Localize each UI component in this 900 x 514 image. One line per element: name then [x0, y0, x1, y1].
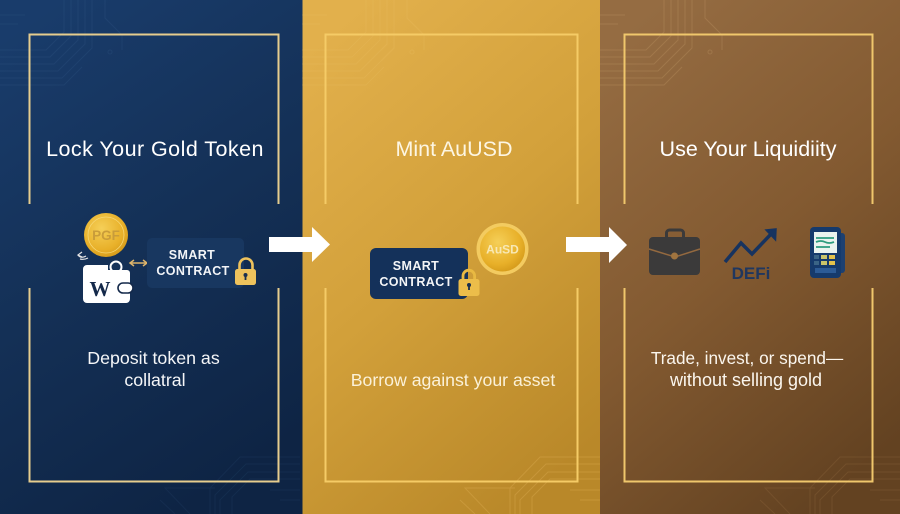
arrow: step 2 to step 3	[566, 227, 627, 263]
icon: DeFi growth chart: DEFi	[732, 264, 770, 283]
icon: gold token coin	[84, 213, 128, 257]
icon: AuUSD coin	[476, 223, 528, 275]
heading: Mint AuUSD: Mint AuUSD	[395, 137, 513, 161]
icon: DeFi growth chart	[725, 229, 776, 283]
frame: step 1	[30, 34, 278, 482]
panel: step 3 background	[600, 0, 900, 514]
arrow: step 1 to step 2	[269, 227, 330, 262]
text: step 3 description	[651, 348, 844, 390]
frame: step 2	[326, 34, 578, 482]
smart contract box: step 1: CONTRACT	[156, 264, 230, 278]
panel: step 2 background	[302, 0, 600, 514]
text: step 1 description: collatral	[124, 370, 186, 390]
icon: AuUSD coin: AuSD	[486, 242, 519, 256]
heading: Use Your Liquidiity: Use Your Liquidiity	[660, 137, 837, 161]
smart contract box: step 2: CONTRACT	[379, 275, 453, 289]
frame: step 3	[624, 34, 872, 482]
text: step 2 description: Borrow against your asset	[351, 370, 555, 390]
smart contract box: step 1: SMART	[169, 248, 215, 262]
icon: wallet	[83, 262, 133, 303]
heading: Lock Your Gold Token: Lock Your Gold Token	[46, 137, 264, 161]
smart contract box: step 2	[370, 248, 468, 299]
icon: briefcase	[649, 230, 700, 275]
icon: double arrow	[130, 260, 147, 266]
text: step 3 description: without selling gold	[669, 370, 822, 390]
smart contract box: step 2: SMART	[393, 259, 439, 273]
icon: payment terminal	[810, 227, 845, 278]
panel: step 1 background	[0, 0, 302, 514]
icon: gold token coin: PGF	[92, 228, 120, 243]
smart contract box: step 1	[147, 238, 244, 288]
text: step 1 description	[87, 348, 220, 390]
text: step 3 description: Trade, invest, or spend—	[651, 348, 844, 368]
icon: wallet: W	[90, 277, 110, 301]
text: step 1 description: Deposit token as	[87, 348, 220, 368]
icon: small cycle arrow	[78, 252, 88, 259]
icon: padlock step 1	[235, 259, 256, 285]
icon: padlock step 2	[458, 270, 480, 296]
